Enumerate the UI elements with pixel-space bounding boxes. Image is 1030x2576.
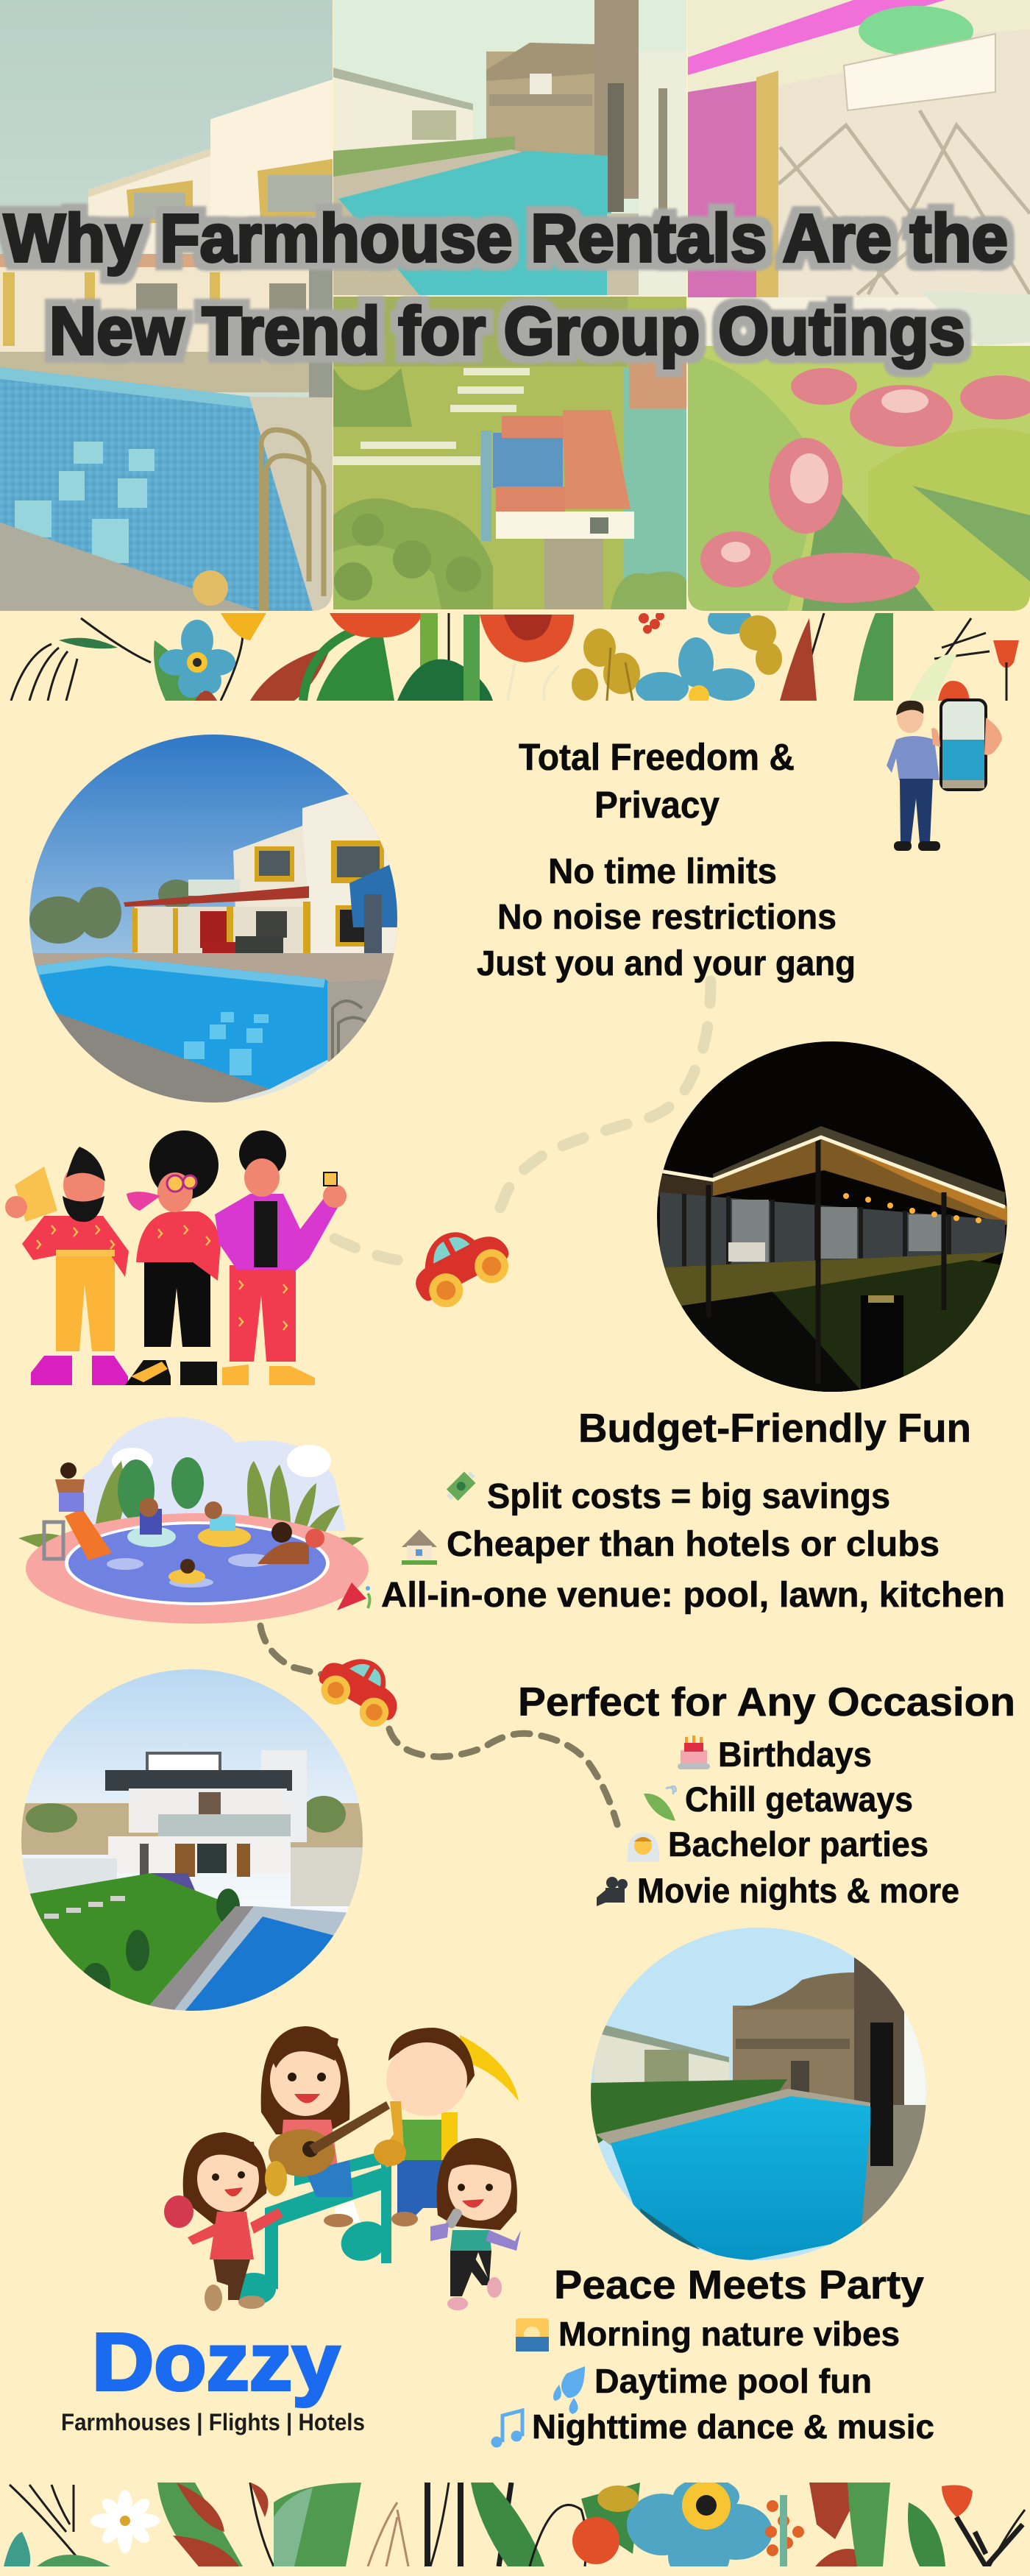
photo circle: villa with pool (29, 734, 397, 1104)
heading: perfect for any occasion: Perfect for Any Occasion (518, 1679, 1015, 1724)
text: occasion list (597, 1735, 959, 1910)
illustration: kids playing music (164, 2026, 521, 2311)
illustration: pool party (18, 1417, 369, 1624)
text: occasion list: Movie nights & more (637, 1871, 959, 1910)
floral border bottom (4, 2483, 1026, 2566)
icon: leaf in wind (644, 1786, 675, 1821)
text: budget list: All-in-one venue: pool, lawn, kitchen (381, 1576, 1005, 1615)
photo: bedroom interior (688, 0, 1030, 611)
text: peace list: Daytime pool fun (594, 2362, 872, 2400)
text: occasion list: Bachelor parties (668, 1825, 928, 1864)
icon: musical notes (493, 2410, 522, 2446)
friend with mug (5, 1147, 129, 1385)
text: occasion list: Chill getaways (685, 1780, 913, 1819)
hero photo collage (0, 0, 1030, 611)
icon: party popper (337, 1582, 370, 1610)
icon: house with garden (402, 1529, 437, 1565)
text: peace list: Nighttime dance & music (532, 2407, 934, 2446)
text: budget list: Split costs = big savings (487, 1477, 890, 1516)
heading: total freedom (519, 736, 795, 826)
icon: sunrise (516, 2318, 549, 2352)
text: budget list: Cheaper than hotels or clubs (447, 1525, 940, 1564)
dashed route 2 (260, 1626, 617, 1825)
photo circle: villa with blue pool (591, 1927, 928, 2267)
icon: movie camera (597, 1877, 628, 1906)
title: New Trend for Group Outings (49, 294, 965, 369)
boy with saxophone (374, 2028, 475, 2226)
photo: pool and villa (333, 0, 686, 295)
floral border top (10, 613, 1019, 701)
yellow pennant (460, 2035, 519, 2101)
text: freedom list: No noise restrictions (497, 898, 837, 937)
icon: man showing phone (887, 698, 1002, 851)
text: peace list: Morning nature vibes (558, 2315, 900, 2353)
heading: total freedom: Privacy (594, 784, 720, 826)
tagline: Farmhouses | Flights | Hotels (61, 2409, 365, 2435)
icon: red car 1 (400, 1211, 519, 1317)
title (4, 201, 1008, 369)
icon: sweat droplets (553, 2366, 585, 2414)
photo circle: night pavilion (657, 1041, 1008, 1398)
music notes (232, 2149, 393, 2305)
girl singing (430, 2138, 521, 2310)
text: freedom list: Just you and your gang (477, 944, 856, 983)
logo: Dozzy (61, 2317, 365, 2435)
photo: aerial view of villa (333, 297, 686, 609)
heading: total freedom: Total Freedom & (519, 736, 795, 778)
text: freedom list (477, 852, 856, 983)
text: freedom list: No time limits (548, 852, 777, 891)
text: budget list (337, 1468, 1005, 1615)
illustration: group of friends (5, 1130, 347, 1385)
icon: person with veil (628, 1833, 659, 1862)
hero photo wash (0, 0, 1030, 611)
icon: red car 2 (310, 1642, 412, 1734)
dashed route 1 (335, 981, 711, 1260)
girl with guitar (261, 2026, 390, 2227)
title: Why Farmhouse Rentals Are the (4, 201, 1008, 276)
photo: farmhouse with pool (0, 0, 333, 611)
icon: birthday cake (678, 1735, 710, 1769)
girl with maracas (164, 2132, 287, 2311)
friend in magenta jacket (215, 1130, 347, 1385)
icon: money with wings (444, 1468, 479, 1504)
text: peace list (493, 2315, 934, 2446)
text: occasion list: Birthdays (718, 1735, 872, 1774)
heading: peace meets party: Peace Meets Party (554, 2262, 924, 2307)
logo: Dozzy: Dozzy (92, 2317, 340, 2407)
friend with party horn (125, 1130, 221, 1385)
photo circle: modern villa (21, 1669, 363, 2017)
heading: budget-friendly fun: Budget-Friendly Fun (578, 1405, 971, 1451)
